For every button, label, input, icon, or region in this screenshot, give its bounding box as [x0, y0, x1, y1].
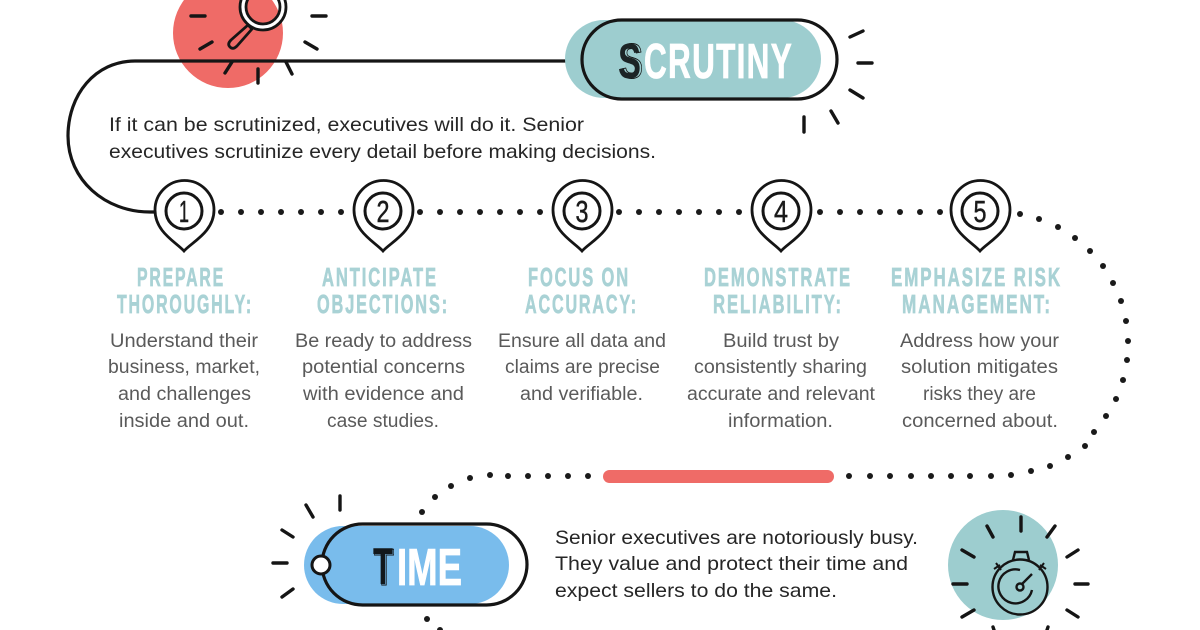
time description: They value and protect their time and	[555, 553, 908, 575]
heading: anticipate objections: ANTICIPATE	[322, 262, 438, 292]
time description: Senior executives are notoriously busy.	[555, 527, 918, 549]
step 3	[498, 180, 666, 405]
dotted curve to bottom section	[419, 211, 1131, 630]
text: step 2 body: with evidence and	[302, 384, 464, 405]
text: step 1 body	[108, 331, 260, 432]
step 4	[687, 180, 876, 432]
heading: focus on accuracy	[525, 262, 638, 319]
heading: emphasize risk management: MANAGEMENT:	[902, 289, 1052, 319]
heading: emphasize risk management: EMPHASIZE RISK	[891, 262, 1062, 292]
text: step 3 body: claims are precise	[505, 357, 660, 378]
time description	[555, 527, 918, 602]
heading: prepare thoroughly	[117, 262, 253, 319]
icon: pin 4	[752, 180, 811, 251]
icon: pin 2	[354, 180, 413, 251]
text: step 5 body: solution mitigates	[901, 357, 1058, 378]
text: step 2 body: Be ready to address	[295, 331, 472, 352]
heading: demonstrate reliability	[704, 262, 852, 319]
text: step 5 body: concerned about.	[902, 411, 1058, 432]
time description: expect sellers to do the same.	[555, 580, 837, 602]
scrutiny badge: S	[620, 35, 643, 89]
text: step 2 body	[295, 331, 472, 432]
heading: emphasize risk management	[891, 262, 1062, 319]
red divider bar	[603, 470, 834, 483]
icon: pin 1	[155, 180, 214, 251]
text: step 4 body: accurate and relevant	[687, 384, 876, 405]
text: step 2 body: potential concerns	[302, 357, 465, 378]
heading: focus on accuracy: ACCURACY:	[525, 289, 638, 319]
time badge: IME	[397, 539, 462, 597]
text: step 5 body	[900, 331, 1060, 432]
icon: pin 5: 5	[974, 194, 986, 229]
icon: pin 3	[553, 180, 612, 251]
icon: pin 1: 1	[179, 194, 189, 229]
text: step 3 body: and verifiable.	[520, 384, 643, 405]
text: step 4 body: Build trust by	[723, 331, 840, 352]
text: step 2 body: case studies.	[327, 411, 439, 432]
time badge	[273, 496, 527, 605]
text: step 4 body: consistently sharing	[694, 357, 867, 378]
step 2	[295, 180, 472, 432]
text: step 5 body: Address how your	[900, 331, 1060, 352]
icon: pin 4: 4	[774, 194, 788, 229]
text: step 3 body: Ensure all data and	[498, 331, 666, 352]
text: step 3 body	[498, 331, 666, 405]
heading: anticipate objections	[317, 262, 449, 319]
heading: prepare thoroughly: PREPARE	[137, 262, 225, 292]
time badge: T	[374, 539, 394, 597]
icon: pin 2: 2	[376, 194, 390, 229]
heading: focus on accuracy: FOCUS ON	[528, 262, 630, 292]
heading: demonstrate reliability: DEMONSTRATE	[704, 262, 852, 292]
icon: pin 3: 3	[576, 194, 588, 229]
step 1	[108, 180, 260, 432]
icon: pin 5	[951, 180, 1010, 251]
time badge: T	[373, 538, 393, 596]
dotted path between steps	[218, 209, 943, 215]
text: step 1 body: inside and out.	[119, 411, 249, 432]
text: step 1 body: and challenges	[118, 384, 251, 405]
text: step 1 body: Understand their	[110, 331, 259, 352]
scrutiny description: executives scrutinize every detail before making decisions.	[109, 141, 656, 163]
scrutiny description	[109, 114, 656, 163]
scrutiny badge	[565, 20, 872, 132]
heading: anticipate objections: OBJECTIONS:	[317, 289, 449, 319]
scrutiny description: If it can be scrutinized, executives will do it. Senior	[109, 114, 585, 136]
text: step 4 body	[687, 331, 876, 432]
icon: magnifying glass on red circle	[173, 0, 326, 88]
connector line from scrutiny pill to step 1	[68, 61, 583, 212]
heading: prepare thoroughly: THOROUGHLY:	[117, 289, 253, 319]
text: step 1 body: business, market,	[108, 357, 260, 378]
heading: demonstrate reliability: RELIABILITY:	[713, 289, 843, 319]
step 5	[891, 180, 1062, 432]
scrutiny badge: S	[618, 35, 641, 89]
text: step 4 body: information.	[728, 411, 833, 432]
text: step 5 body: risks they are	[923, 384, 1036, 405]
scrutiny badge: CRUTINY	[644, 35, 793, 89]
icon: stopwatch on teal circle	[948, 510, 1088, 630]
